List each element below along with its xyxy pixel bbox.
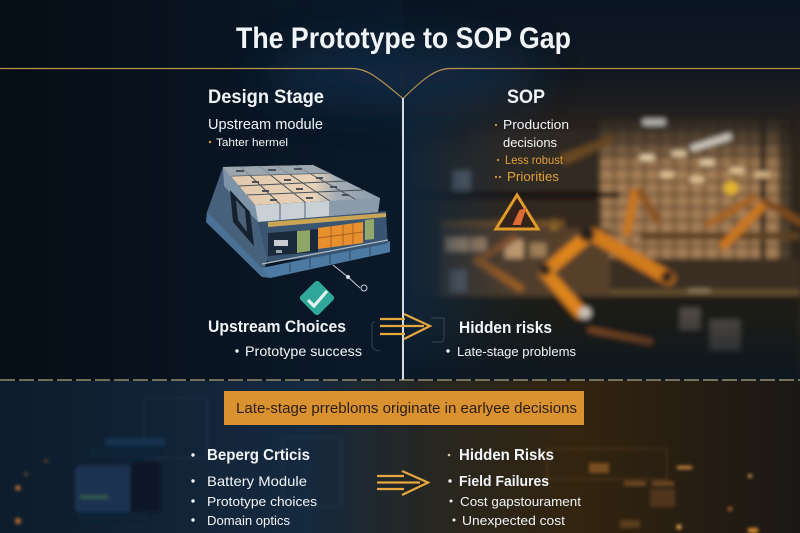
- list: left bottom: Beperg Crticis: [207, 447, 310, 464]
- text: production decisions: [495, 117, 569, 150]
- panel: bottom band: [0, 381, 800, 533]
- list: left bottom: Domain optics: [207, 513, 290, 528]
- heading: hidden risks upper: Hidden risks: [459, 319, 552, 337]
- text: priorities: Priorities: [507, 170, 559, 184]
- decorative bracket: [372, 318, 444, 351]
- text: production decisions: decisions: [503, 135, 557, 150]
- icon: teal check badge: [299, 280, 335, 316]
- server hardware: [105, 438, 165, 446]
- arrow: upper transition: [380, 314, 430, 339]
- text: late-stage problems: Late-stage problems: [457, 344, 576, 359]
- vertical divider: [402, 98, 404, 380]
- icon: battery module: [206, 165, 390, 278]
- heading: upstream choices: Upstream Choices: [208, 317, 346, 336]
- callout banner: Late-stage prrebloms originate in earlyee decisions: [236, 400, 577, 417]
- heading: design stage: Design Stage: [208, 87, 324, 108]
- panel: SOP factory photo background: [403, 0, 800, 380]
- top connector line: [0, 68, 800, 98]
- text: prototype success: Prototype success: [245, 344, 362, 359]
- list: left bottom: Battery Module: [207, 473, 307, 489]
- text: tahter hermel bullet: Tahter hermel: [216, 137, 288, 149]
- text: production decisions: Production: [503, 117, 569, 132]
- list: left bottom: Prototype choices: [207, 494, 318, 509]
- arrow: lower transition: [377, 471, 428, 495]
- robot arms: [477, 192, 800, 342]
- list: right bottom: Hidden Risks: [459, 447, 554, 464]
- list: right bottom: Field Failures: [459, 473, 549, 490]
- list: right bottom: Unexpected cost: [462, 513, 565, 528]
- list: right bottom: [448, 447, 581, 528]
- text: upstream module: Upstream module: [208, 117, 323, 133]
- heading: SOP: SOP: [507, 87, 545, 108]
- title: The Prototype to SOP Gap: [236, 22, 571, 55]
- callout banner: [224, 391, 584, 425]
- text: less robust: Less robust: [505, 153, 564, 167]
- icon: warning triangle: [496, 195, 538, 229]
- icon: connector node: [333, 265, 367, 291]
- list: left bottom: [191, 447, 318, 528]
- panel: top glow: [260, 47, 540, 103]
- list: right bottom: Cost gapstourament: [460, 494, 581, 509]
- horizontal dashed divider: [0, 379, 800, 381]
